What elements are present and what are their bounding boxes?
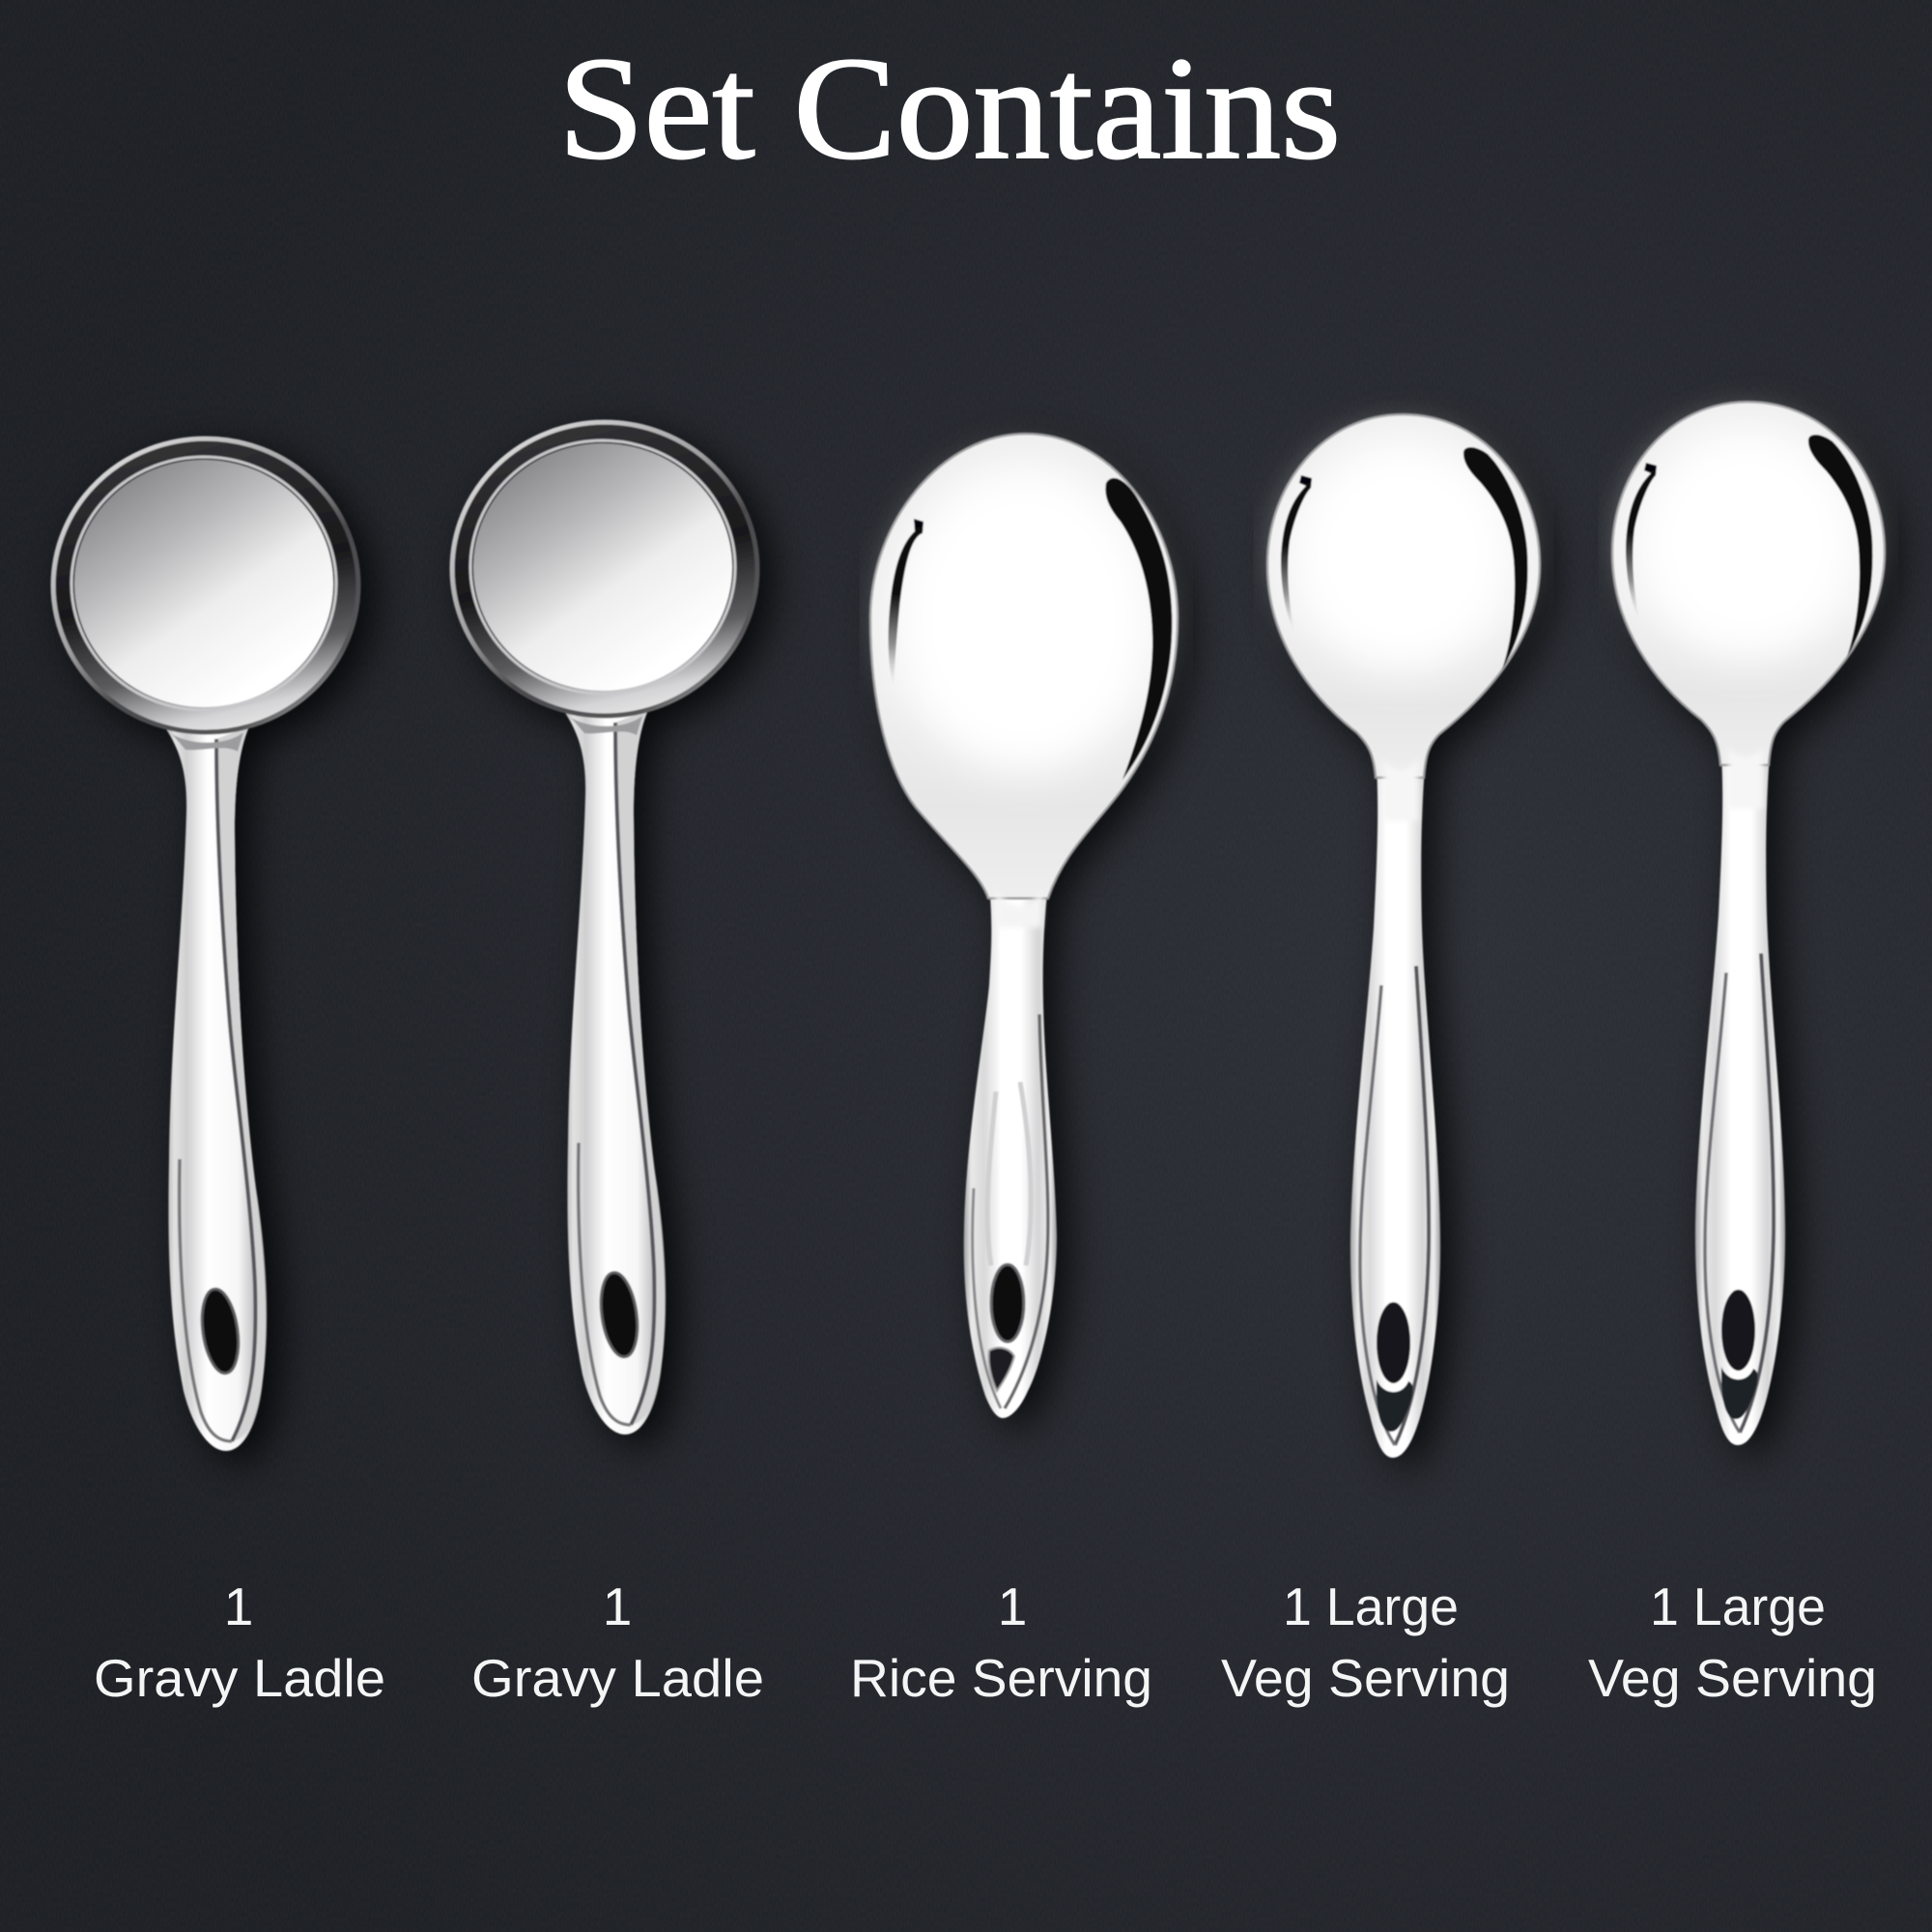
label: 1 large veg serving: 1 Large [1650,1577,1826,1636]
label: 1 gravy ladle [94,1577,385,1708]
utensil: rice serving spoon [870,434,1191,1430]
label: 1 rice serving: 1 [998,1577,1027,1636]
label: 1 gravy ladle: Gravy Ladle [94,1648,385,1708]
label: 1 gravy ladle: 1 [603,1577,632,1636]
utensil: gravy ladle 1 [53,439,374,1463]
label: 1 gravy ladle: 1 [224,1577,253,1636]
utensil: large veg serving spoon 1 [1267,414,1553,1469]
label: 1 large veg serving [1588,1577,1877,1708]
utensil: gravy ladle 2 [452,422,773,1446]
label: 1 rice serving: Rice Serving [850,1648,1152,1708]
label: 1 large veg serving: Veg Serving [1588,1648,1877,1708]
label: 1 large veg serving: Veg Serving [1221,1648,1510,1708]
label: 1 large veg serving: 1 Large [1283,1577,1459,1636]
title: Set Contains [558,27,1341,189]
label: 1 gravy ladle [471,1577,764,1708]
label: 1 gravy ladle: Gravy Ladle [471,1648,764,1708]
label: 1 large veg serving [1221,1577,1510,1708]
utensil: large veg serving spoon 2 [1612,402,1898,1457]
label: 1 rice serving [850,1577,1152,1708]
